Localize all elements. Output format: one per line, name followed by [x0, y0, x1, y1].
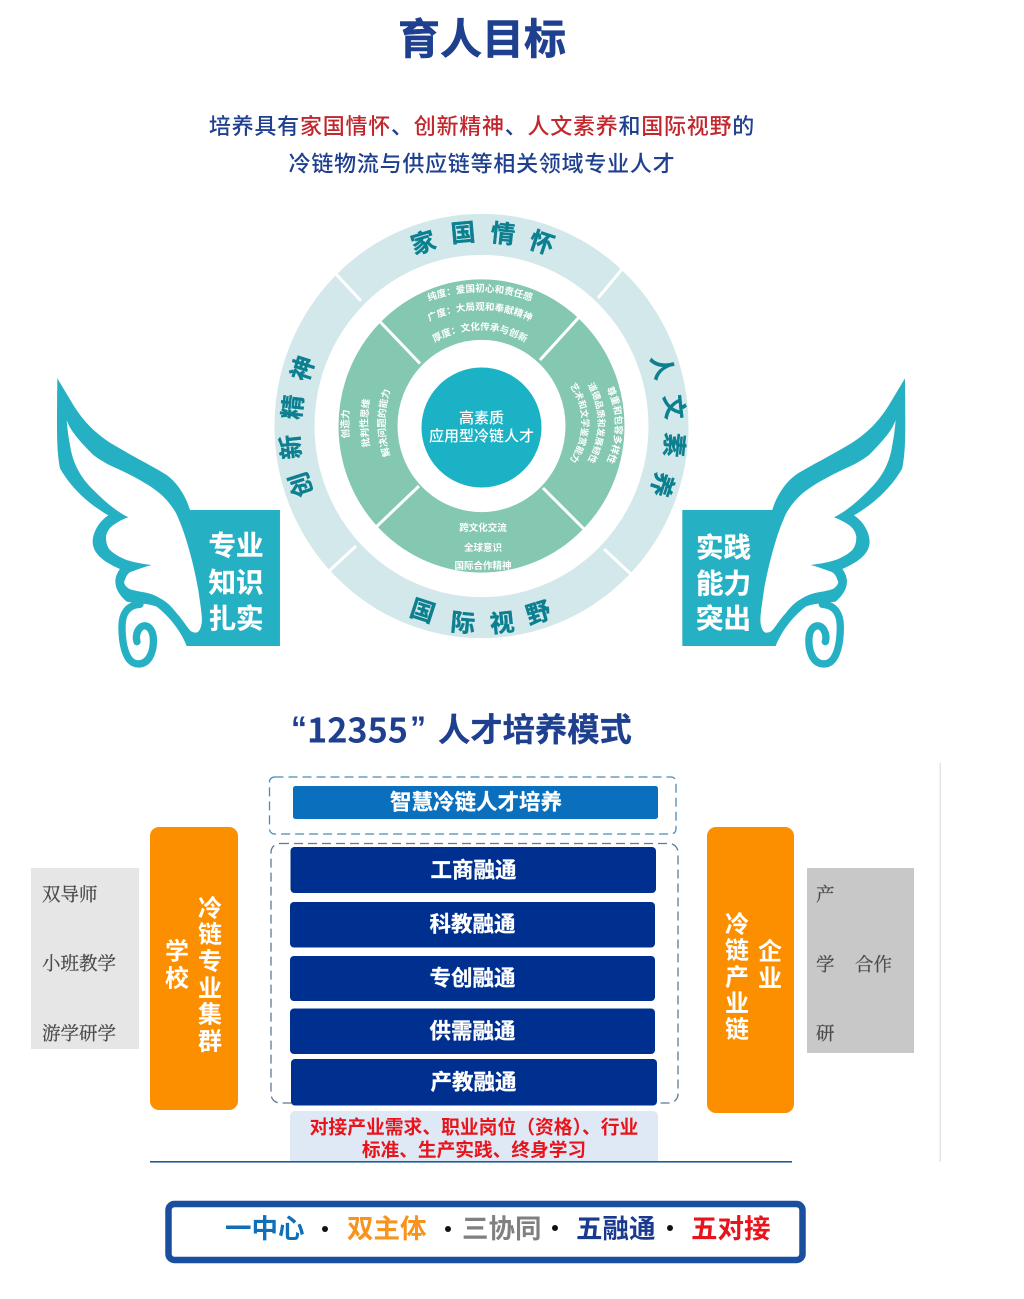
panel: school orange column: 冷 — [198, 888, 222, 924]
panel: school orange column: 学 — [165, 932, 189, 966]
inner ring text: top: 纯度：爱国初心和责任感 — [427, 283, 534, 302]
inner ring text: bottom: 国际合作精神 — [454, 558, 512, 572]
right wing label: 突出 — [696, 596, 751, 636]
panel: slogan bar: 三协同 — [462, 1207, 542, 1246]
panel: slogan bar: 五融通 — [576, 1207, 656, 1246]
bar: 供需融通 — [290, 1008, 655, 1054]
center circle: 应用型冷链人才 — [429, 425, 534, 446]
outer ring label: 家国情怀: 家 — [406, 222, 440, 262]
inner ring text: top: 广度：大局观和奉献精神 — [428, 302, 533, 322]
panel: docking note — [290, 1111, 658, 1162]
section heading: 12355 model: “ — [291, 710, 307, 746]
left wing label: 扎实 — [208, 596, 264, 636]
goal statement — [209, 109, 755, 178]
inner ring text: left — [340, 389, 391, 457]
panel: enterprise orange column: 业 — [758, 958, 782, 994]
inner ring text: left: 批判性思维 — [359, 398, 370, 448]
outer ring label: 人文素养: 文 — [656, 393, 694, 421]
inner ring text: bottom: 跨文化交流 — [459, 520, 507, 534]
outer ring label: 家国情怀 — [406, 213, 559, 262]
outer ring label: 创新精神 — [271, 351, 322, 502]
bar: 工商融通 — [290, 847, 656, 893]
panel: enterprise orange column: 企 — [758, 932, 782, 966]
outer ring label: 人文素养 — [643, 351, 694, 502]
outer ring label: 人文素养: 人 — [643, 351, 683, 383]
bar: 产教融通: 产教融通 — [430, 1066, 517, 1096]
inner ring text: left: 解决问题的能力 — [377, 389, 391, 457]
panel: smart cold chain banner: 智慧冷链人才培养 — [390, 786, 562, 816]
outer ring label: 家国情怀: 怀 — [525, 222, 559, 262]
right wing label — [696, 525, 751, 636]
panel: school orange column: 集 — [198, 994, 222, 1030]
bar: 科教融通 — [290, 902, 655, 948]
title: 育人目标 — [398, 6, 566, 67]
center circle: 高素质 — [459, 407, 504, 428]
inner ring text: right: 尊重和包容多样性 — [606, 386, 624, 464]
icon: left wing shape — [57, 378, 280, 664]
divider line right — [940, 763, 941, 1162]
base line — [150, 1161, 792, 1163]
panel: docking note: 标准、生产实践、终身学习 — [362, 1136, 586, 1162]
inner ring text: top — [427, 283, 534, 343]
outer ring label: 人文素养: 素 — [656, 431, 694, 459]
left wing label — [208, 523, 264, 636]
section heading: 12355 model: ” — [410, 710, 426, 746]
bar: 专创融通 — [290, 956, 655, 1001]
panel: enterprise orange column: 产 — [725, 958, 749, 992]
panel: school orange column: 链 — [198, 914, 222, 950]
outer ring label: 国际视野: 国 — [406, 590, 440, 630]
outer ring label: 国际视野: 野 — [521, 592, 555, 632]
panel: enterprise orange column: 链 — [725, 930, 749, 966]
panel: slogan bar — [168, 1204, 802, 1260]
panel: left grey list: 小班教学 — [42, 950, 116, 976]
panel: left grey list: 游学研学 — [42, 1020, 116, 1046]
panel: five integrations — [271, 844, 678, 1106]
inner ring text: right — [570, 382, 624, 464]
section heading: 12355 model — [291, 704, 632, 752]
panel: school orange column: 群 — [198, 1022, 222, 1056]
panel: slogan bar: 一中心 — [225, 1207, 304, 1246]
outer ring label: 家国情怀: 国 — [449, 213, 477, 251]
panel: right grey list: 产 — [816, 881, 835, 907]
panel: school orange column: 专 — [198, 942, 222, 976]
right wing label: 能力 — [696, 561, 751, 601]
panel: right grey list: 合作 — [855, 951, 892, 977]
inner ring text: right: 道德品质和发展韧性 — [587, 382, 606, 464]
circular diagram — [271, 213, 694, 641]
panel: docking note: 对接产业需求、职业岗位（资格）、行业 — [310, 1112, 638, 1140]
inner ring text: top: 厚度：文化传承与创新 — [432, 322, 528, 343]
inner ring text: right: 艺术和文学鉴赏能力 — [570, 382, 590, 463]
outer ring label: 创新精神: 创 — [280, 468, 320, 502]
panel: right grey list: 研 — [816, 1020, 835, 1046]
inner ring — [368, 310, 595, 542]
panel: right grey list: 学 — [816, 951, 835, 977]
panel: enterprise orange column — [707, 827, 794, 1113]
left wing label: 专业 — [208, 523, 264, 563]
outer ring label: 创新精神: 新 — [271, 433, 309, 461]
section heading: 12355 model: 人才培养模式 — [438, 705, 632, 751]
panel: right grey list — [807, 868, 914, 1053]
panel: smart cold chain banner — [270, 777, 676, 834]
outer ring label: 国际视野: 际 — [449, 603, 477, 641]
panel: enterprise orange column: 业 — [725, 984, 749, 1018]
outer ring label: 人文素养: 养 — [643, 468, 683, 502]
inner ring text: bottom — [454, 520, 512, 572]
right wing label: 实践 — [696, 525, 751, 565]
bar: 产教融通 — [291, 1059, 657, 1106]
panel: left grey list: 双导师 — [42, 881, 98, 907]
panel: slogan bar: 双主体 — [347, 1207, 427, 1246]
inner ring text: bottom: 全球意识 — [464, 540, 502, 554]
panel: enterprise orange column: 链 — [725, 1010, 749, 1044]
icon: right wing shape — [682, 378, 905, 664]
outer ring label: 家国情怀: 情 — [489, 214, 517, 252]
right wing — [682, 378, 905, 664]
goal statement: 冷链物流与供应链等相关领域专业人才 — [289, 146, 675, 178]
panel: left grey list — [31, 868, 139, 1049]
outer ring label: 国际视野: 视 — [488, 603, 516, 641]
outer ring — [294, 234, 668, 618]
panel: school orange column: 业 — [198, 968, 222, 1004]
panel: school orange column — [150, 827, 238, 1110]
panel: school orange column: 校 — [165, 958, 189, 994]
inner ring text: left: 创造力 — [340, 410, 350, 438]
outer ring label: 国际视野 — [406, 590, 555, 641]
center circle — [422, 368, 542, 488]
panel: slogan bar: 五对接 — [691, 1207, 770, 1246]
left wing label: 知识 — [208, 560, 264, 600]
section heading: 12355 model: 12355 — [307, 704, 408, 752]
panel: enterprise orange column: 冷 — [725, 904, 749, 940]
bar: 专创融通: 专创融通 — [429, 962, 516, 992]
goal statement: 培养具有家国情怀、创新精神、人文素养和国际视野的 — [209, 109, 755, 141]
bar: 供需融通: 供需融通 — [429, 1014, 516, 1046]
left wing — [57, 378, 280, 664]
bar: 科教融通: 科教融通 — [429, 908, 516, 938]
bar: 工商融通: 工商融通 — [430, 854, 517, 884]
outer ring label: 创新精神: 精 — [273, 393, 311, 421]
outer ring label: 创新精神: 神 — [282, 351, 322, 385]
